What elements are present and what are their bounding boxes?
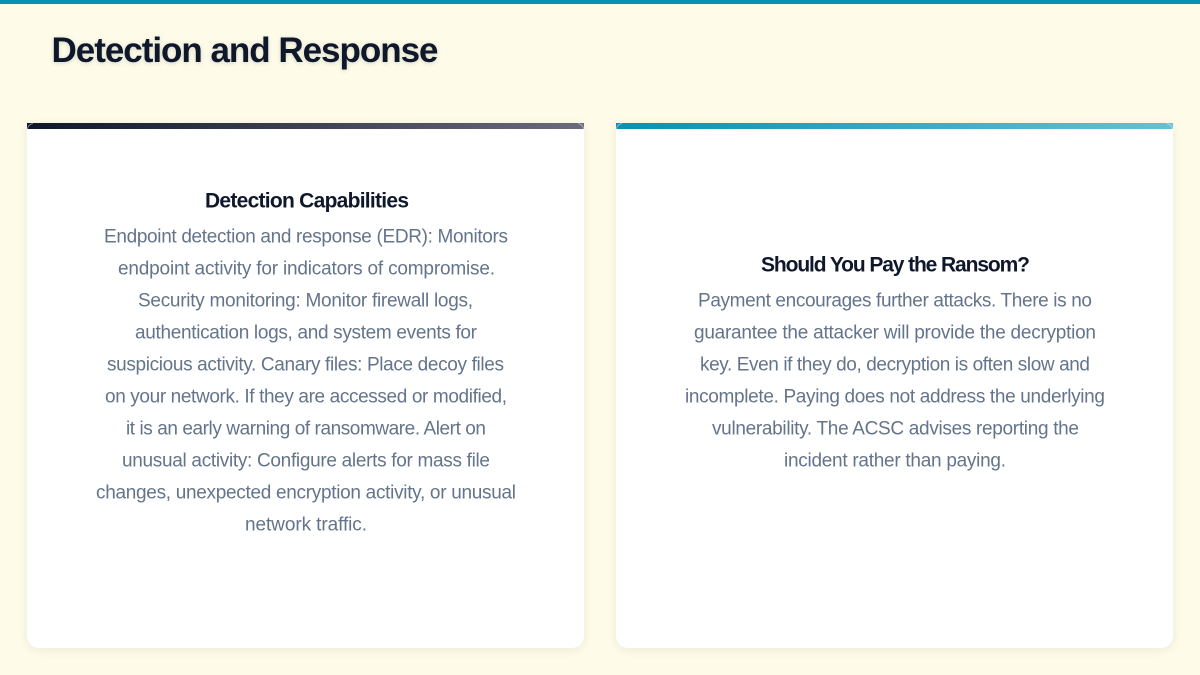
text block: detection capabilities: network traffic. bbox=[245, 514, 367, 535]
text block: should you pay the ransom: incomplete. Paying does not address the underlying bbox=[685, 386, 1105, 407]
text block: detection capabilities: suspicious activity. Canary files: Place decoy files bbox=[107, 354, 504, 375]
text block: should you pay the ransom: Payment encourages further attacks. There is no bbox=[698, 290, 1092, 311]
text block: detection capabilities bbox=[96, 226, 516, 535]
text block: should you pay the ransom: vulnerability. The ACSC advises reporting the bbox=[712, 418, 1079, 439]
text block: should you pay the ransom: key. Even if they do, decryption is often slow and bbox=[700, 354, 1090, 375]
text block: detection capabilities: on your network. If they are accessed or modified, bbox=[105, 386, 507, 407]
text block: detection capabilities: Endpoint detection and response (EDR): Monitors bbox=[104, 226, 508, 247]
title: Detection and Response bbox=[52, 31, 438, 70]
panel: detection capabilities card bbox=[27, 123, 584, 648]
text block: detection capabilities: Security monitoring: Monitor firewall logs, bbox=[138, 290, 473, 311]
heading: should you pay the ransom: Should You Pay the Ransom? bbox=[761, 254, 1030, 276]
heading: detection capabilities: Detection Capabilities bbox=[205, 190, 409, 212]
text block: detection capabilities: authentication logs, and system events for bbox=[135, 322, 478, 343]
text block: should you pay the ransom: guarantee the attacker will provide the decryption bbox=[694, 322, 1096, 343]
text block: detection capabilities: changes, unexpected encryption activity, or unusual bbox=[96, 482, 516, 503]
top accent strip bbox=[0, 0, 1200, 4]
text block: detection capabilities: unusual activity: Configure alerts for mass file bbox=[122, 450, 490, 471]
panel: ransom card bbox=[616, 123, 1173, 648]
text block: detection capabilities: endpoint activity for indicators of compromise. bbox=[118, 258, 495, 279]
gradient bar: detection card bbox=[27, 123, 584, 129]
text block: should you pay the ransom bbox=[685, 290, 1105, 471]
gradient bar: ransom card bbox=[616, 123, 1173, 129]
text block: detection capabilities: it is an early warning of ransomware. Alert on bbox=[126, 418, 486, 439]
text block: should you pay the ransom: incident rather than paying. bbox=[784, 450, 1006, 471]
